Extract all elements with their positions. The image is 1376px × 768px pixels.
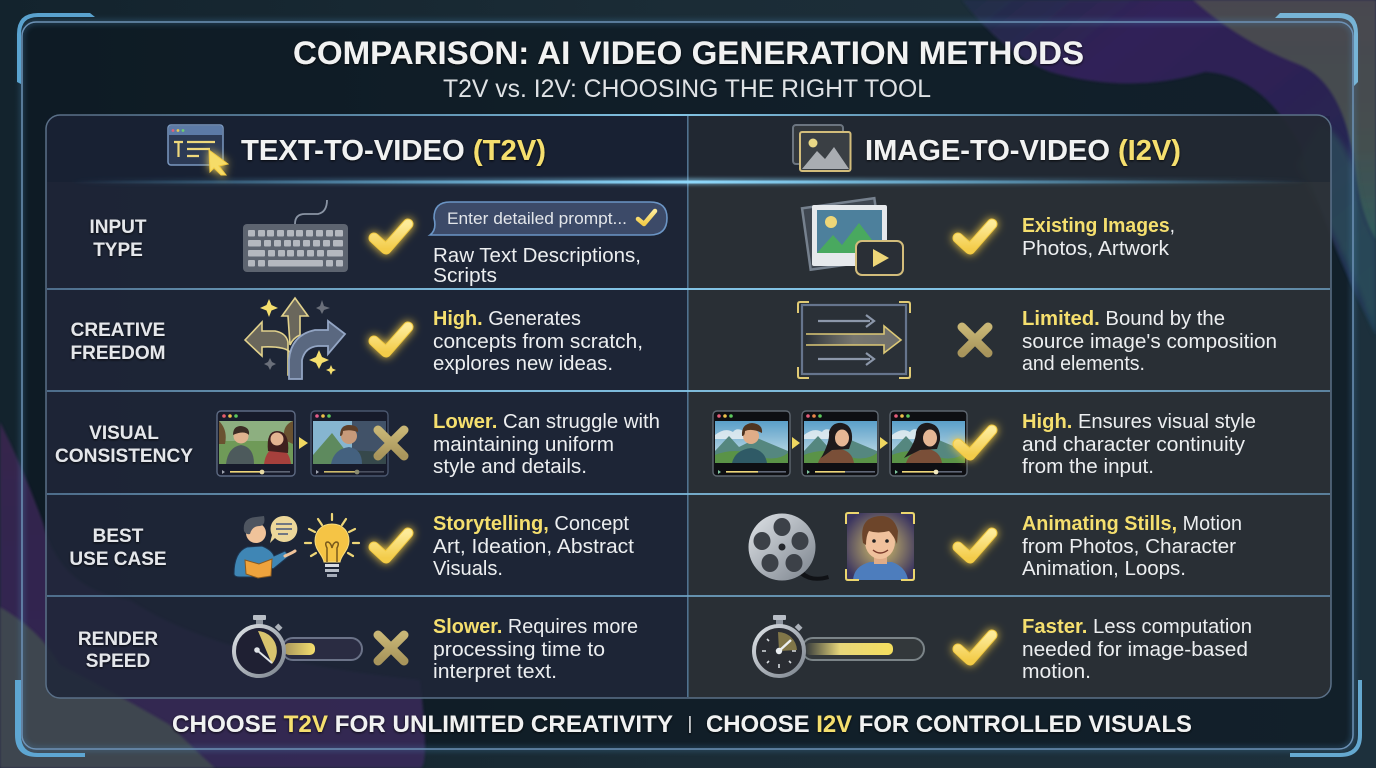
description: concepts from scratch,: [433, 330, 643, 353]
icon: check: [958, 635, 992, 660]
arrow: [792, 437, 800, 449]
heading: T2V column: [168, 125, 546, 175]
subtitle: T2V vs. I2V: CHOOSING THE RIGHT TOOL: [443, 75, 931, 103]
row label: RENDER: [78, 629, 158, 650]
description: interpret text.: [433, 660, 557, 683]
description: Raw Text Descriptions,: [433, 244, 641, 267]
description: Animating Stills, Motion: [1022, 512, 1242, 535]
description: Lower. Can struggle with: [433, 410, 660, 433]
arrow: [880, 437, 888, 449]
background wave: right teal: [1296, 125, 1376, 335]
heading text: TEXT-TO-VIDEO (T2V): [241, 135, 546, 167]
panel: left column T2V: [46, 115, 688, 698]
description: Existing Images,: [1022, 214, 1175, 237]
icon: slow stopwatch with bar: [234, 615, 362, 676]
frame 2: [311, 411, 388, 476]
description: [1022, 615, 1252, 683]
icon: lightbulb: [305, 514, 359, 577]
row label: CONSISTENCY: [55, 446, 193, 467]
description: Faster. Less computation: [1022, 615, 1252, 638]
row label: USE CASE: [69, 549, 167, 570]
description: processing time to: [433, 638, 605, 661]
row: best use case: [69, 512, 1242, 581]
description: High. Ensures visual style: [1022, 410, 1256, 433]
description: [433, 410, 660, 478]
description: Storytelling, Concept: [433, 512, 629, 535]
description: Limited. Bound by the: [1022, 307, 1225, 330]
row label: VISUAL: [89, 423, 159, 444]
frame 1: [217, 411, 295, 476]
row label: SPEED: [86, 651, 150, 672]
prompt bubble: Enter detailed prompt...: [447, 210, 627, 228]
row label: [70, 320, 166, 364]
background wave: top right grey: [1193, 0, 1376, 240]
description: [433, 244, 641, 287]
heading text: IMAGE-TO-VIDEO (I2V): [865, 135, 1181, 167]
description: needed for image-based: [1022, 638, 1248, 661]
description: [433, 512, 634, 580]
description: explores new ideas.: [433, 352, 613, 375]
top edge highlight: [80, 114, 1260, 116]
heading: I2V column: [793, 125, 1181, 171]
frame 1: [713, 411, 790, 476]
row label: TYPE: [93, 240, 143, 261]
icon: check: [374, 533, 408, 558]
background wave: top right purple: [962, 0, 1376, 335]
description: [433, 307, 643, 375]
arrow: [299, 437, 308, 449]
background wave: left purple: [0, 422, 425, 768]
description: Slower. Requires more: [433, 615, 638, 638]
description: Scripts: [433, 264, 497, 287]
row label: [90, 217, 147, 261]
description: source image's composition: [1022, 330, 1277, 353]
icon: photo with play button: [802, 198, 903, 275]
column divider: [687, 116, 689, 697]
icon: check: [374, 327, 408, 352]
row rules: [47, 288, 1330, 597]
description: Art, Ideation, Abstract: [433, 535, 634, 558]
frame 3: [890, 411, 967, 476]
icon: check: [958, 224, 992, 249]
icon: cross: [378, 430, 404, 456]
row: input type: [90, 198, 1175, 287]
row label: [69, 526, 167, 570]
row label: [55, 423, 193, 467]
row label: BEST: [93, 526, 144, 547]
row label: INPUT: [90, 217, 147, 238]
icon: branching arrows: [245, 298, 345, 379]
description: from the input.: [1022, 455, 1154, 478]
row label: CREATIVE: [71, 320, 165, 341]
header band: [47, 116, 1330, 182]
description: maintaining uniform: [433, 433, 614, 456]
title: COMPARISON: AI VIDEO GENERATION METHODS: [293, 35, 1084, 71]
icon: text window with cursor: [168, 125, 228, 175]
video frame sequence: inconsistent: [217, 411, 404, 476]
icon: storyteller: [234, 516, 297, 578]
description: [1022, 307, 1277, 375]
bottom takeaway: CHOOSE I2V FOR CONTROLLED VISUALS: [706, 711, 1192, 738]
description: motion.: [1022, 660, 1091, 683]
table outline: [46, 115, 1331, 698]
description: Photos, Artwork: [1022, 237, 1170, 260]
description: and elements.: [1022, 352, 1145, 375]
row: render speed: [78, 615, 1252, 683]
prompt bubble: [430, 202, 667, 235]
icon: keyboard: [243, 200, 348, 272]
icon: check: [374, 224, 408, 249]
description: Animation, Loops.: [1022, 557, 1186, 580]
header rule: [70, 178, 1310, 185]
row label: [78, 629, 158, 672]
icon: film reel: [748, 514, 829, 581]
icon: animated portrait: [846, 513, 914, 580]
description: style and details.: [433, 455, 587, 478]
description: [1022, 214, 1175, 260]
description: [1022, 512, 1242, 580]
bottom takeaway: [172, 711, 1192, 738]
row: creative freedom: [70, 298, 1277, 379]
panel: right column I2V: [688, 115, 1331, 698]
description: from Photos, Character: [1022, 535, 1236, 558]
icon: stacked images: [793, 125, 850, 171]
row: visual consistency: [55, 410, 1256, 478]
frame 2: [802, 411, 878, 476]
row label: FREEDOM: [70, 343, 166, 364]
icon: check: [958, 430, 992, 455]
video frame sequence: consistent: [713, 411, 992, 476]
description: and character continuity: [1022, 433, 1246, 456]
icon: fast stopwatch with bar: [754, 615, 924, 676]
icon: cross: [378, 635, 404, 661]
description: Visuals.: [433, 557, 503, 580]
icon: bounded arrows frame: [798, 302, 910, 378]
bottom takeaway: CHOOSE T2V FOR UNLIMITED CREATIVITY: [172, 711, 673, 738]
icon: check: [958, 533, 992, 558]
description: High. Generates: [433, 307, 581, 330]
background wave: left grey: [0, 607, 215, 768]
description: [1022, 410, 1256, 478]
icon: cross: [962, 327, 988, 353]
description: [433, 615, 638, 683]
